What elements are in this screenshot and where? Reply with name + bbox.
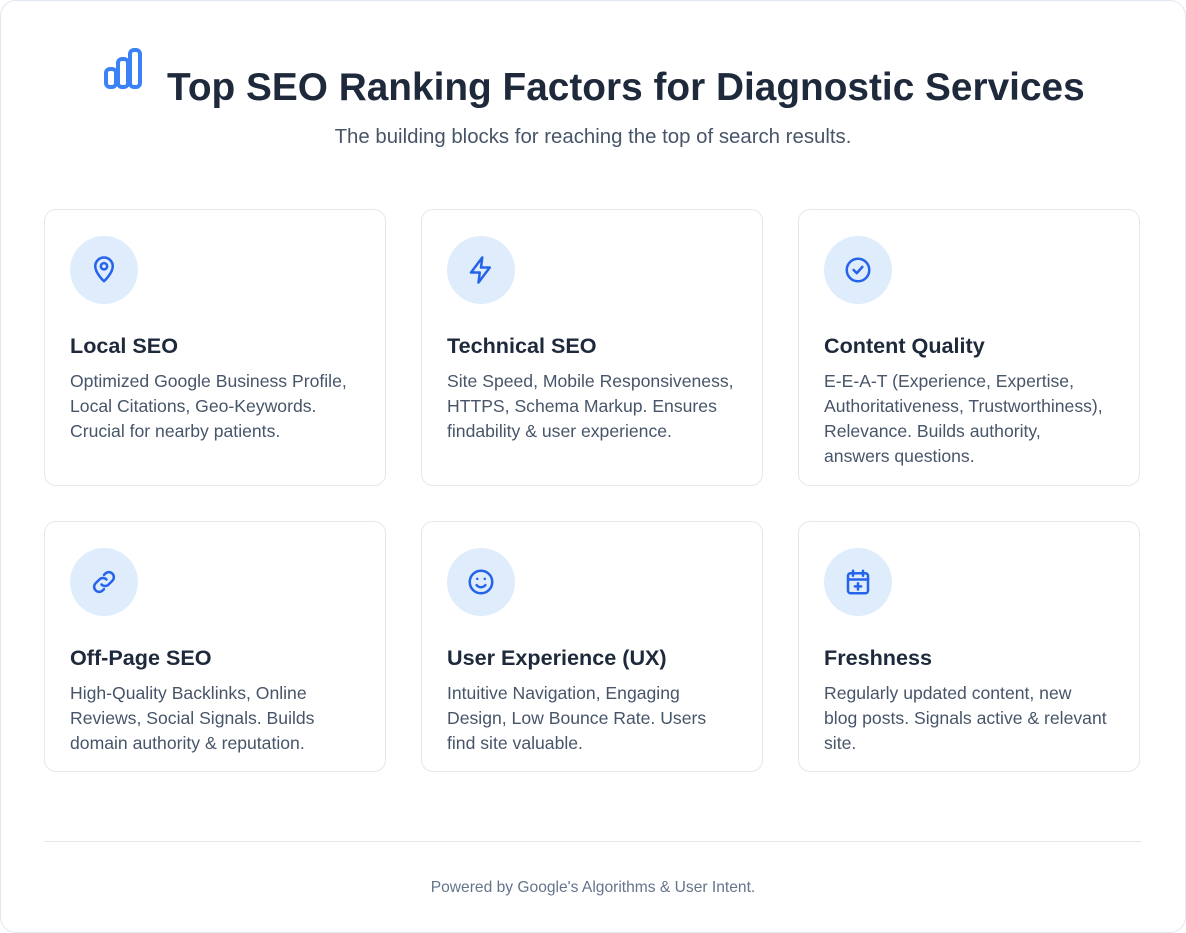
text: Relevance. Builds authority, bbox=[824, 421, 1041, 441]
heading: Freshness bbox=[824, 645, 932, 670]
icon: calendar plus bbox=[824, 548, 892, 616]
text: find site valuable. bbox=[447, 733, 583, 753]
panel: off-page seo bbox=[44, 521, 386, 772]
heading: Local SEO bbox=[70, 333, 178, 358]
text: blog posts. Signals active & relevant bbox=[824, 708, 1107, 728]
title: Top SEO Ranking Factors for Diagnostic Services bbox=[167, 66, 1085, 109]
text: Reviews, Social Signals. Builds bbox=[70, 708, 314, 728]
heading: User Experience (UX) bbox=[447, 645, 667, 670]
panel: technical seo bbox=[421, 209, 763, 486]
heading: Off-Page SEO bbox=[70, 645, 212, 670]
text: domain authority & reputation. bbox=[70, 733, 305, 753]
subtitle: The building blocks for reaching the top of search results. bbox=[335, 126, 851, 148]
text bbox=[70, 683, 314, 753]
icon: link bbox=[70, 548, 138, 616]
text bbox=[70, 371, 347, 441]
text: answers questions. bbox=[824, 446, 975, 466]
heading: Content Quality bbox=[824, 333, 985, 358]
text: Optimized Google Business Profile, bbox=[70, 371, 347, 391]
text: Site Speed, Mobile Responsiveness, bbox=[447, 371, 734, 391]
text: E-E-A-T (Experience, Expertise, bbox=[824, 371, 1074, 391]
text bbox=[447, 371, 734, 441]
text bbox=[447, 683, 706, 753]
icon: lightning bbox=[447, 236, 515, 304]
text: High-Quality Backlinks, Online bbox=[70, 683, 307, 703]
text bbox=[824, 371, 1103, 466]
icon: map pin bbox=[70, 236, 138, 304]
panel: user experience bbox=[421, 521, 763, 772]
text: Local Citations, Geo-Keywords. bbox=[70, 396, 316, 416]
heading: Technical SEO bbox=[447, 333, 597, 358]
icon: check circle bbox=[824, 236, 892, 304]
text: Design, Low Bounce Rate. Users bbox=[447, 708, 706, 728]
icon: bar chart bbox=[104, 48, 142, 89]
text: findability & user experience. bbox=[447, 421, 672, 441]
panel: freshness bbox=[798, 521, 1140, 772]
icon: smiley bbox=[447, 548, 515, 616]
footer: Powered by Google's Algorithms & User Intent. bbox=[431, 879, 755, 896]
text: Crucial for nearby patients. bbox=[70, 421, 280, 441]
text: HTTPS, Schema Markup. Ensures bbox=[447, 396, 717, 416]
text bbox=[824, 683, 1107, 753]
text: site. bbox=[824, 733, 856, 753]
text: Regularly updated content, new bbox=[824, 683, 1071, 703]
text: Intuitive Navigation, Engaging bbox=[447, 683, 680, 703]
panel: content quality bbox=[798, 209, 1140, 486]
text: Authoritativeness, Trustworthiness), bbox=[824, 396, 1103, 416]
panel: local seo bbox=[44, 209, 386, 486]
